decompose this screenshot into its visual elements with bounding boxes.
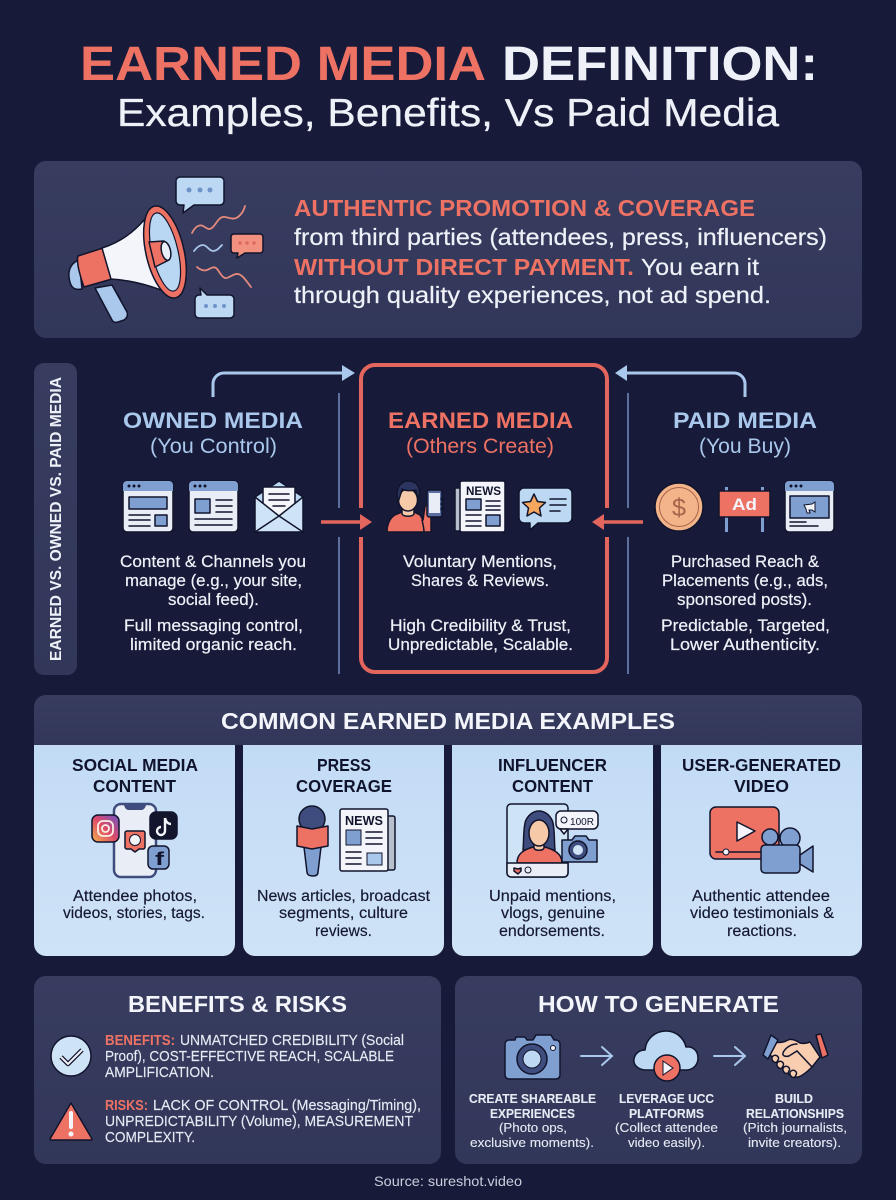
earned description: Voluntary Mentions, — [403, 553, 557, 571]
owned description: limited organic reach. — [130, 636, 297, 654]
benefits text: UNMATCHED CREDIBILITY (Social — [180, 1033, 404, 1049]
icon: influencer post with camera — [507, 804, 598, 877]
icon: envelope — [255, 481, 303, 532]
card: press coverage — [243, 745, 444, 956]
icon: review bubble — [519, 488, 572, 530]
arrow: owned into earned — [321, 514, 372, 530]
earned heading: EARNED MEDIA — [388, 408, 573, 433]
icon: person with phone — [387, 481, 444, 532]
owned description — [120, 553, 306, 654]
icon: ad sign: Ad — [732, 495, 757, 514]
owned description: Content & Channels you — [120, 553, 306, 571]
card text: endorsements. — [499, 923, 605, 940]
owned description: social feed). — [168, 591, 259, 609]
definition text: through quality experiences, not ad spend. — [294, 282, 771, 308]
card heading: VIDEO — [734, 776, 789, 796]
heading: BENEFITS & RISKS — [128, 991, 347, 1017]
step 2 text: PLATFORMS — [629, 1106, 704, 1121]
icon: newspaper — [340, 809, 395, 871]
step 3 text: BUILD — [775, 1091, 813, 1106]
step 2 text: (Collect attendee — [615, 1120, 718, 1135]
card text — [63, 888, 205, 922]
icon: influencer post with camera: 100R — [570, 816, 594, 828]
card heading — [296, 755, 392, 796]
earned heading — [388, 408, 573, 458]
icon: phone with social apps: f — [155, 849, 166, 869]
card: social media content — [34, 745, 235, 956]
side label: earned vs owned vs paid — [34, 363, 77, 675]
risks text: RISKS: — [105, 1098, 148, 1114]
arrow: paid into earned — [592, 514, 643, 530]
card text — [489, 888, 616, 940]
panel: benefits and risks — [34, 976, 441, 1164]
card heading: CONTENT — [512, 776, 593, 796]
icon: ad sign — [719, 487, 770, 532]
step 1 text: (Photo ops, — [499, 1120, 567, 1135]
arrow — [714, 1047, 745, 1065]
card text: News articles, broadcast — [257, 888, 431, 905]
arrow — [581, 1047, 612, 1065]
definition text: You earn it — [641, 254, 760, 280]
panel: earned media highlight box — [361, 365, 607, 672]
card text: Attendee photos, — [73, 888, 197, 905]
card heading: COVERAGE — [296, 776, 392, 796]
icon: video player and camera — [710, 807, 813, 873]
benefits text: Proof), COST-EFFECTIVE REACH, SCALABLE — [105, 1049, 394, 1065]
card heading: INFLUENCER — [498, 755, 607, 775]
icon: handshake — [763, 1034, 828, 1077]
step 3 text: RELATIONSHIPS — [746, 1106, 844, 1121]
icon: dollar coin — [655, 483, 703, 531]
card text — [257, 888, 431, 940]
column: earned media — [387, 408, 573, 654]
title: EARNED MEDIA — [80, 38, 486, 91]
title — [80, 38, 818, 135]
paid heading: (You Buy) — [699, 435, 791, 458]
card: user-generated video — [661, 745, 862, 956]
card heading: SOCIAL MEDIA — [72, 755, 198, 775]
owned description: manage (e.g., your site, — [125, 572, 302, 590]
risks text: LACK OF CONTROL (Messaging/Timing), — [153, 1098, 421, 1114]
definition text: AUTHENTIC PROMOTION & COVERAGE — [294, 195, 755, 221]
card text: video testimonials & — [690, 905, 834, 922]
card heading — [72, 755, 198, 796]
divider lines — [339, 393, 628, 674]
title: Examples, Benefits, Vs Paid Media — [117, 92, 779, 135]
icon: phone with social apps — [92, 804, 177, 877]
card text: Authentic attendee — [692, 888, 830, 905]
benefits text — [105, 1033, 404, 1081]
card text: reviews. — [315, 923, 372, 940]
earned description — [388, 553, 573, 654]
step 1 text: EXPERIENCES — [490, 1106, 575, 1121]
owned heading: OWNED MEDIA — [123, 408, 303, 433]
icon: newspaper: NEWS — [345, 814, 383, 828]
paid description: Placements (e.g., ads, — [662, 572, 828, 590]
step 3 text: invite creators). — [748, 1135, 841, 1150]
paid heading: PAID MEDIA — [673, 408, 817, 433]
icon: camera — [505, 1035, 560, 1079]
paid description — [661, 553, 830, 654]
icon: check — [51, 1036, 91, 1076]
source line: Source: sureshot.video — [374, 1173, 522, 1189]
card heading: PRESS — [317, 755, 371, 775]
panel: how to generate — [455, 976, 862, 1164]
icon: article page — [189, 481, 238, 532]
side label: earned vs owned vs paid: EARNED VS. OWNED VS. PAID MEDIA — [48, 377, 65, 661]
column: paid media — [655, 408, 834, 654]
paid description: Lower Authenticity. — [670, 636, 820, 654]
heading: HOW TO GENERATE — [538, 991, 779, 1017]
icon: website page — [123, 481, 173, 532]
card text — [690, 888, 834, 940]
panel: definition — [34, 161, 862, 338]
step 1 text: CREATE SHAREABLE — [469, 1091, 596, 1106]
card heading: CONTENT — [93, 776, 176, 796]
step 3 text: (Pitch journalists, — [743, 1120, 847, 1135]
owned heading — [123, 408, 303, 458]
icon: warning triangle — [50, 1103, 92, 1140]
arrow: owned to earned — [213, 365, 355, 397]
step 2 text — [615, 1091, 718, 1150]
definition text: from third parties (attendees, press, influencers) — [294, 224, 827, 250]
arrow: paid to earned — [615, 365, 745, 397]
step 2 text: LEVERAGE UCC — [619, 1091, 714, 1106]
owned heading: (You Control) — [150, 435, 277, 458]
benefits text: AMPLIFICATION. — [105, 1065, 214, 1081]
risks text — [105, 1098, 421, 1146]
icon: megaphone with speech bubbles — [69, 177, 263, 322]
card text: segments, culture — [279, 905, 408, 922]
icon: cloud with play button — [634, 1031, 698, 1081]
card text: vlogs, genuine — [501, 905, 605, 922]
title: DEFINITION: — [502, 38, 818, 91]
paid heading — [673, 408, 817, 458]
card heading — [682, 755, 841, 796]
earned description: Unpredictable, Scalable. — [388, 636, 573, 654]
section heading: common earned media examples — [34, 695, 862, 745]
step 1 text: exclusive moments). — [470, 1135, 594, 1150]
earned description: High Credibility & Trust, — [390, 617, 571, 635]
earned description: Shares & Reviews. — [411, 572, 549, 590]
definition text: WITHOUT DIRECT PAYMENT. — [294, 254, 634, 280]
card text: videos, stories, tags. — [63, 905, 205, 922]
column: owned media — [120, 408, 306, 654]
risks text: COMPLEXITY. — [105, 1130, 195, 1146]
paid description: Purchased Reach & — [671, 553, 819, 571]
earned heading: (Others Create) — [406, 435, 554, 458]
card heading: USER-GENERATED — [682, 755, 841, 775]
icon: ad in browser — [785, 481, 834, 532]
definition text — [294, 195, 827, 308]
card text: reactions. — [727, 923, 797, 940]
section heading: common earned media examples: COMMON EARNED MEDIA EXAMPLES — [221, 708, 675, 734]
card: influencer content — [452, 745, 653, 956]
icon: dollar coin: $ — [672, 494, 686, 522]
step 3 text — [743, 1091, 847, 1150]
icon: newspaper — [455, 481, 505, 532]
owned description: Full messaging control, — [124, 617, 303, 635]
icon: microphone — [297, 806, 328, 876]
card heading — [498, 755, 607, 796]
paid description: Predictable, Targeted, — [661, 617, 830, 635]
step 1 text — [469, 1091, 596, 1150]
risks text: UNPREDICTABILITY (Volume), MEASUREMENT — [105, 1114, 413, 1130]
benefits text: BENEFITS: — [105, 1033, 175, 1049]
card text: Unpaid mentions, — [489, 888, 616, 905]
paid description: sponsored posts). — [677, 591, 812, 609]
step 2 text: video easily). — [628, 1135, 705, 1150]
icon: newspaper: NEWS — [466, 484, 501, 498]
